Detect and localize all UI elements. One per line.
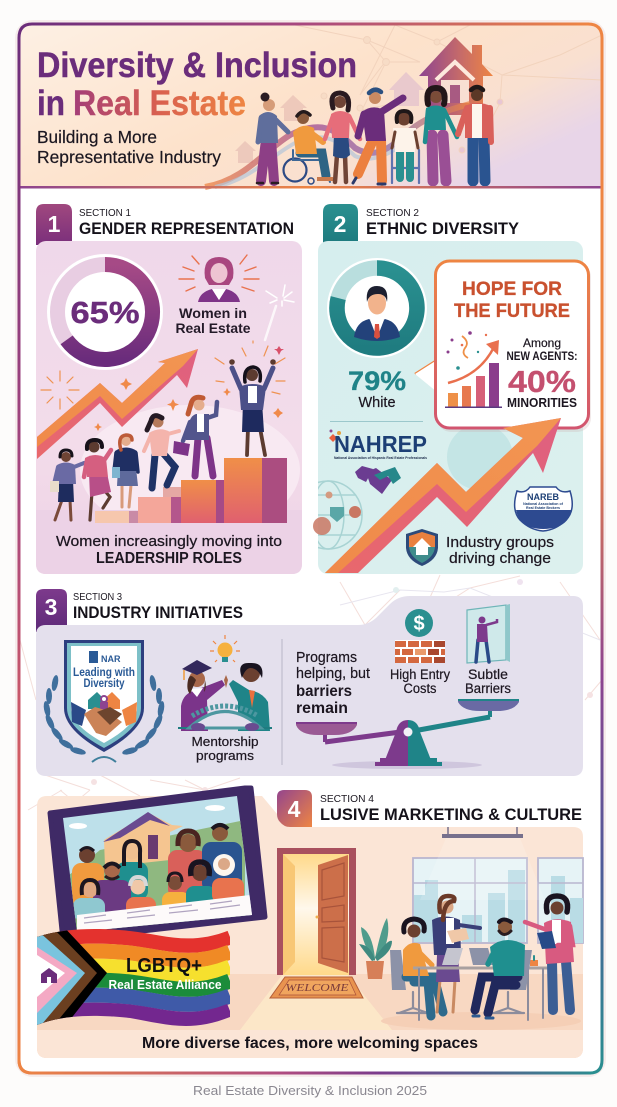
icon: person at glass barrier — [467, 604, 510, 663]
vertical divider — [282, 639, 283, 765]
NAR wordmark: NAR — [101, 654, 121, 664]
section 1 badge — [36, 204, 72, 245]
student with cap — [181, 660, 225, 731]
women in real estate label: Real Estate — [176, 321, 251, 336]
floor — [37, 974, 583, 1058]
woman 4 climbing — [144, 416, 179, 488]
icon: house shield — [406, 529, 438, 566]
person 6 — [425, 88, 457, 181]
section 1 badge: 1 — [48, 211, 61, 237]
standing woman with clipboard — [525, 896, 574, 1010]
section 1 label: SECTION 1 — [79, 208, 131, 219]
ceiling lamp — [420, 827, 545, 900]
staircase bars — [95, 458, 287, 523]
NAREB shield logo: Real Estate Brokers — [526, 506, 560, 510]
programs text: Programs — [296, 650, 357, 666]
person 1 — [257, 92, 288, 183]
big house icon — [419, 37, 493, 115]
NAHREP logo: National Association of Hispanic Real Estate Professionals — [334, 456, 427, 460]
woman 3 climbing — [112, 435, 138, 507]
donut chart 79% white — [327, 258, 427, 358]
among new agents: Among — [523, 336, 561, 350]
mentor — [224, 663, 270, 731]
balance scale — [296, 699, 519, 769]
panel: ethnic diversity — [294, 241, 591, 574]
rainbow flag LGBTQ+ — [37, 925, 230, 1030]
background network pattern — [20, 575, 602, 815]
person 4 — [353, 90, 403, 184]
donut chart 65%: 65% — [70, 295, 140, 330]
panel 1 caption: Women increasingly moving into — [56, 533, 282, 550]
callout heading: HOPE FOR — [462, 278, 562, 300]
high entry costs label: High Entry — [390, 667, 450, 682]
icon: businesswoman with rays — [179, 255, 259, 302]
title: Diversity & Inclusion — [37, 46, 357, 85]
section 4 badge: 4 — [288, 796, 301, 822]
woman 5 with handbag — [173, 397, 217, 476]
potted plant — [359, 918, 392, 979]
globe pins — [313, 492, 361, 535]
icon: handshake — [355, 466, 401, 494]
donut chart 65% — [47, 254, 163, 370]
section 2 label: SECTION 2 — [366, 208, 419, 219]
programs text: helping, but — [296, 666, 370, 682]
white label: White — [358, 395, 396, 411]
person 2 in wheelchair — [284, 112, 333, 184]
subtle barriers label: Barriers — [465, 681, 511, 696]
section 4 label: SECTION 4 — [320, 794, 374, 805]
programs text: barriers — [296, 683, 352, 700]
industry groups label: Industry groups — [446, 534, 554, 551]
NAREB shield logo: National Association of — [523, 502, 564, 506]
icon: dollar coin on brick wall — [395, 609, 445, 663]
seated woman — [390, 919, 443, 1016]
minorities: MINORITIES — [507, 396, 577, 410]
subtitle: Representative Industry — [37, 147, 221, 167]
mentorship label: programs — [196, 748, 255, 763]
title line 2: in — [37, 84, 65, 123]
panel: gender representation — [36, 241, 302, 574]
woman 6 on top with arms raised — [229, 359, 276, 455]
icon: businessman — [354, 286, 400, 341]
floor band — [36, 510, 302, 574]
40% figure: 40% — [508, 364, 576, 399]
section 4 badge — [277, 790, 312, 827]
illustration: diverse group of people — [257, 87, 492, 184]
flag title: LGBTQ+ — [126, 955, 202, 977]
panel: inclusive marketing and culture — [37, 788, 583, 1058]
divider — [330, 421, 423, 422]
flag subtitle: Real Estate Alliance — [108, 978, 222, 992]
panel 1 caption: LEADERSHIP ROLES — [96, 550, 242, 567]
panel: industry initiatives — [36, 596, 583, 776]
industry groups label: driving change — [449, 550, 551, 567]
house — [104, 813, 183, 867]
NAREB shield logo: NAREB — [527, 492, 559, 502]
section 4 heading: LUSIVE MARKETING & CULTURE — [320, 805, 582, 824]
section 3 label: SECTION 3 — [73, 592, 122, 603]
section 3 badge: 3 — [45, 594, 57, 620]
hero header banner — [19, 24, 602, 187]
office window 2 — [538, 858, 583, 943]
NAREB shield logo — [515, 487, 572, 531]
section 2 heading: ETHNIC DIVERSITY — [366, 219, 520, 238]
NAR mark — [89, 651, 98, 663]
women in real estate label: Women in — [179, 306, 247, 321]
badge title: Diversity — [84, 678, 125, 690]
welcome mat — [270, 977, 363, 998]
rising arrow — [37, 349, 198, 459]
callout heading: THE FUTURE — [454, 300, 570, 322]
person 5 in wheelchair — [392, 111, 419, 183]
person 3 — [325, 93, 360, 182]
callout: hope for the future — [415, 261, 591, 432]
icon: dollar coin on brick wall: $ — [413, 613, 425, 635]
group rug shadow — [381, 1012, 581, 1030]
section 3 heading: INDUSTRY INITIATIVES — [73, 603, 243, 622]
woman 1 climbing — [50, 450, 84, 520]
subtitle: Building a More — [37, 127, 157, 147]
section 2 badge — [323, 204, 358, 245]
tablet with diverse family — [50, 788, 265, 940]
family members — [72, 863, 104, 913]
high entry costs label: Costs — [404, 681, 437, 696]
79% figure: 79% — [348, 366, 406, 396]
panel 4 caption: More diverse faces, more welcoming spaces — [142, 1035, 478, 1052]
background globes — [318, 430, 512, 550]
seated man — [473, 920, 532, 1018]
programs text: remain — [296, 700, 348, 717]
large rising arrow — [325, 418, 561, 573]
open door — [277, 848, 356, 975]
mini bar chart with arrow — [445, 331, 502, 408]
standing woman with papers — [432, 896, 480, 1012]
NAHREP logo: NAHREP — [334, 431, 427, 457]
glow behind staircase — [80, 405, 300, 535]
title line 2: Real Estate — [73, 84, 246, 123]
section 2 badge: 2 — [334, 211, 346, 237]
among new agents: NEW AGENTS: — [506, 349, 578, 363]
bridge — [178, 706, 272, 731]
light bulb — [210, 635, 240, 662]
woman 2 climbing — [84, 440, 111, 520]
header divider — [19, 186, 602, 188]
welcome mat: WELCOME — [286, 983, 348, 994]
NAR badge with laurels — [43, 640, 165, 762]
network lines in header — [295, 25, 602, 160]
caption strip — [77, 895, 255, 933]
mentorship label: Mentorship — [192, 734, 258, 749]
flowing ribbon — [205, 104, 470, 187]
door light on floor — [240, 975, 392, 1030]
burst and sparkles — [41, 341, 285, 409]
office window 1 — [413, 858, 527, 943]
section 1 heading: GENDER REPRESENTATION — [79, 219, 294, 238]
subtle barriers label: Subtle — [468, 667, 508, 682]
footer: Real Estate Diversity & Inclusion 2025 — [193, 1083, 427, 1098]
desk and laptops — [413, 948, 549, 1020]
person 7 — [458, 87, 492, 181]
firework sparkle — [265, 285, 294, 340]
office team — [390, 896, 574, 1020]
mentorship illustration — [178, 635, 272, 731]
pale houses — [235, 72, 424, 163]
badge icons — [88, 692, 105, 709]
house mark on flag — [41, 968, 57, 983]
laurels — [43, 675, 165, 756]
section 3 badge — [36, 589, 67, 632]
badge title: Leading with — [73, 667, 135, 679]
